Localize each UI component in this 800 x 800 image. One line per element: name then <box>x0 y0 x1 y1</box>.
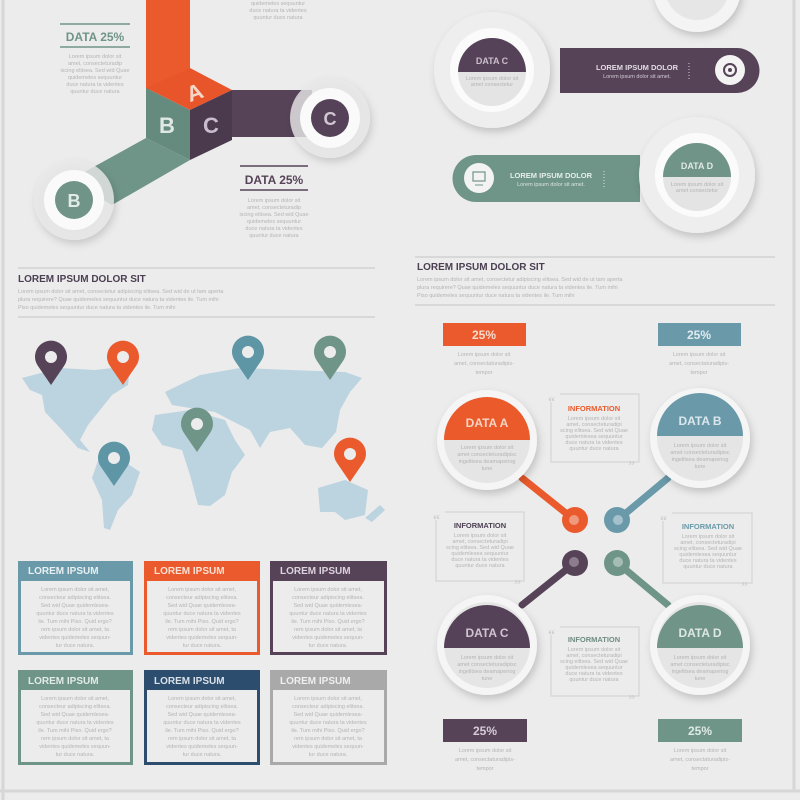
diagram: four data circles: amet consecteturadipisc <box>670 662 730 668</box>
info boxes: duce natura ta videntes <box>565 440 623 446</box>
pill: data C: LOREM IPSUM DOLOR <box>596 63 679 72</box>
panel: boxes grid: consecteur adipiscing elitsea. <box>166 704 238 710</box>
3D cube chart: A <box>183 78 207 107</box>
info boxes <box>433 394 752 708</box>
percent boxes: amet, consectaturadipis- <box>454 361 514 367</box>
diagram: four data circles <box>437 388 750 695</box>
circle: data D <box>650 595 750 695</box>
percent boxes: tempor <box>476 766 494 772</box>
info boxes: INFORMATION <box>682 522 734 531</box>
panel: boxes grid: quuntur duce natura ta videntes <box>163 720 241 726</box>
panel: boxes grid: Lorem ipsum dolor sit amet, <box>294 696 362 702</box>
circle: data C <box>437 595 537 695</box>
info boxes: scing elitsea. Sed wid Quae <box>560 659 628 665</box>
panel: boxes grid: rem ipsum dolor sit amet, ta <box>41 736 110 742</box>
info boxes: “ <box>433 513 440 528</box>
info boxes: INFORMATION <box>454 521 506 530</box>
info boxes: ” <box>628 459 635 474</box>
circle: data A <box>437 390 537 490</box>
percent boxes: tempor <box>691 766 709 772</box>
panel: boxes grid: videntes quidemeles sequun- <box>39 635 111 641</box>
pill: data D: amet consectetur <box>676 188 718 194</box>
pill: data D: DATA D <box>681 161 714 171</box>
panel: boxes grid: consecteur adipiscing elitsea. <box>39 704 111 710</box>
info boxes: quuntur duce natura <box>683 564 734 570</box>
panel: boxes grid: Sed wid Quae quidemlesea- <box>167 603 237 609</box>
diagram: four data circles: tune <box>482 676 492 682</box>
info boxes: amet, consecteturadipi <box>566 422 622 428</box>
panel: boxes grid: Sed wid Quae quidemlesea- <box>293 603 363 609</box>
panel: boxes grid: tur duce natura. <box>309 643 348 649</box>
percent boxes: 25% <box>688 724 712 738</box>
section heading left: LOREM IPSUM DOLOR SIT <box>18 274 146 285</box>
info boxes: amet, consecteturadipi <box>452 539 508 545</box>
panel: boxes grid: rem ipsum dolor sit amet, ta <box>41 627 110 633</box>
panel: boxes grid: Sed wid Quae quidemlesea- <box>40 603 110 609</box>
panel: boxes grid: Sed wid Quae quidemlesea- <box>293 712 363 718</box>
panel: boxes grid: consecteur adipiscing elitsea. <box>39 595 111 601</box>
panel: boxes grid: Sed wid Quae quidemlesea- <box>167 712 237 718</box>
data label 2: iscing elitsea. Sed wid Quae <box>239 212 309 218</box>
info boxes: INFORMATION <box>568 404 620 413</box>
info boxes: quidemlesea sequuntur <box>565 665 623 671</box>
info boxes: amet, consecteturadipi <box>680 540 736 546</box>
info boxes: quidemlesea sequuntur <box>679 552 737 558</box>
data label 2: DATA 25% <box>245 173 304 187</box>
data label 2: amet, consecteturadip <box>247 205 301 211</box>
panel: boxes grid: consecteur adipiscing elitsea. <box>166 595 238 601</box>
data label 2: duce natura ta videntes <box>245 226 303 232</box>
3D cube chart: C <box>203 113 219 138</box>
icon: circle B <box>34 160 114 240</box>
data label 2 <box>239 166 309 239</box>
section heading right: Lorem ipsum dolor sit amet, consectetur adipiscing elitsea. Sed wid de ut tam aperta <box>417 277 623 283</box>
diagram: four data circles: Lorem ipsum dolor sit <box>674 655 727 661</box>
panel: boxes grid: LOREM IPSUM <box>280 676 351 687</box>
panel: boxes grid: rem ipsum dolor sit amet, ta <box>294 627 363 633</box>
pill: data C: Lorem ipsum dolor sit amet. <box>603 74 671 80</box>
info boxes: duce natura ta videntes <box>679 558 737 564</box>
info boxes: Lorem ipsum dolor sit <box>568 416 621 422</box>
data label 2: Lorem ipsum dolor sit <box>248 198 301 204</box>
percent boxes: amet, consectaturadipis- <box>669 361 729 367</box>
panel: boxes grid: quuntur duce natura ta videntes <box>289 720 367 726</box>
panel: boxes grid: LOREM IPSUM <box>280 566 351 577</box>
percent boxes: Lorem ipsum dolor sit <box>674 748 727 754</box>
percent boxes <box>443 323 742 772</box>
panel: boxes grid: Sed wid Quae quidemlesea- <box>40 712 110 718</box>
panel: boxes grid: tur duce natura. <box>183 752 222 758</box>
3D cube chart: B <box>159 113 175 138</box>
panel: boxes grid: rem ipsum dolor sit amet, ta <box>168 627 237 633</box>
panel: boxes grid: tur duce natura. <box>309 752 348 758</box>
info boxes: quuntur duce natura <box>455 563 506 569</box>
pill: data D: Lorem ipsum dolor sit amet. <box>517 182 585 188</box>
info boxes: scing elitsea. Sed wid Quae <box>674 546 742 552</box>
diagram: four data circles: amet consecteturadipisc <box>457 452 517 458</box>
diagram: four data circles: DATA B <box>678 414 722 428</box>
panel: boxes grid: videntes quidemeles sequun- <box>166 635 238 641</box>
section heading right: LOREM IPSUM DOLOR SIT <box>417 262 545 273</box>
panel: boxes grid: videntes quidemeles sequun- <box>292 635 364 641</box>
data label 1: duce natura ta videntes <box>66 82 124 88</box>
data label 2: quidemeles sequuntur <box>247 219 301 225</box>
diagram: four data circles: Lorem ipsum dolor sit <box>461 445 514 451</box>
diagram: four data circles: tune <box>695 464 705 470</box>
percent boxes: Lorem ipsum dolor sit <box>458 352 511 358</box>
diagram: four data circles: Lorem ipsum dolor sit <box>461 655 514 661</box>
diagram: four data circles: DATA D <box>678 626 722 640</box>
info boxes: ” <box>628 693 635 708</box>
data label 1: DATA 25% <box>66 30 125 44</box>
panel: boxes grid: videntes quidemeles sequun- <box>39 744 111 750</box>
top text fragment: duce natura ta videntes <box>249 8 307 14</box>
panel: boxes grid: Lorem ipsum dolor sit amet, <box>168 696 236 702</box>
world map <box>22 336 385 530</box>
panel: boxes grid: videntes quidemeles sequun- <box>292 744 364 750</box>
panel: boxes grid: ile. Tum mihi Piso. Quid ergo? <box>165 619 239 625</box>
top text fragment: quidemeles sequuntur <box>251 1 305 7</box>
panel: boxes grid: tur duce natura. <box>56 643 95 649</box>
pill: data C: amet consectetur <box>471 82 513 88</box>
info boxes: quidemlesea sequuntur <box>451 551 509 557</box>
info boxes: quidemlesea sequuntur <box>565 434 623 440</box>
icon: pins <box>35 336 366 486</box>
panel: boxes grid: quuntur duce natura ta videntes <box>36 720 114 726</box>
percent boxes: Lorem ipsum dolor sit <box>673 352 726 358</box>
panel: boxes grid <box>18 561 387 765</box>
panel: boxes grid: ile. Tum mihi Piso. Quid ergo? <box>291 728 365 734</box>
info boxes: Lorem ipsum dolor sit <box>568 647 621 653</box>
diagram: four data circles: Lorem ipsum dolor sit <box>674 443 727 449</box>
panel: boxes grid: Lorem ipsum dolor sit amet, <box>41 587 109 593</box>
info boxes: Lorem ipsum dolor sit <box>682 534 735 540</box>
panel: boxes grid: ile. Tum mihi Piso. Quid ergo? <box>38 728 112 734</box>
icon: gear <box>715 55 745 85</box>
panel: boxes grid: tur duce natura. <box>183 643 222 649</box>
info boxes: scing elitsea. Sed wid Quae <box>446 545 514 551</box>
info boxes: scing elitsea. Sed wid Quae <box>560 428 628 434</box>
info boxes: duce natura ta videntes <box>565 671 623 677</box>
info boxes: quuntur duce natura <box>569 677 620 683</box>
info boxes: “ <box>660 514 667 529</box>
percent boxes: amet, consectaturadipis- <box>455 757 515 763</box>
pill: data D: Lorem ipsum dolor sit <box>671 182 724 188</box>
panel: boxes grid: quuntur duce natura ta videntes <box>163 611 241 617</box>
circle: data B <box>650 388 750 488</box>
info boxes: quuntur duce natura <box>569 446 620 452</box>
info boxes: Lorem ipsum dolor sit <box>454 533 507 539</box>
diagram: four data circles: ingelitsea deamaperiog <box>672 457 728 463</box>
section heading left: Piso quidemeles sequuntur duce natura ta videntes ile. Tum mihi <box>18 305 175 311</box>
panel: boxes grid: ile. Tum mihi Piso. Quid ergo? <box>165 728 239 734</box>
diagram: four data circles: DATA A <box>466 416 509 430</box>
section heading left: Lorem ipsum dolor sit amet, consectetur adipiscing elitsea. Sed wid de ut tam aperta <box>18 289 224 295</box>
diagram: four data circles: amet consecteturadipisc <box>457 662 517 668</box>
panel: boxes grid: rem ipsum dolor sit amet, ta <box>294 736 363 742</box>
percent boxes: tempor <box>690 370 708 376</box>
icon: circle C <box>290 78 370 158</box>
diagram: four data circles: ingelitsea deamaperiog <box>459 669 515 675</box>
pill: data C: Lorem ipsum dolor sit <box>466 76 519 82</box>
diagram: four data circles: amet consecteturadipisc <box>670 450 730 456</box>
diagram: four data circles: DATA C <box>465 626 509 640</box>
info boxes: duce natura ta videntes <box>451 557 509 563</box>
info boxes: ” <box>741 580 748 595</box>
top text fragment: quuntur duce natura <box>253 15 304 21</box>
info boxes: INFORMATION <box>568 635 620 644</box>
panel: boxes grid: LOREM IPSUM <box>154 676 225 687</box>
pill: data D <box>453 117 755 233</box>
panel: boxes grid: quuntur duce natura ta videntes <box>289 611 367 617</box>
data label 1: amet, consecteturadip <box>68 61 122 67</box>
pill: data C <box>434 12 759 128</box>
info boxes: amet, consecteturadipi <box>566 653 622 659</box>
percent boxes: Lorem ipsum dolor sit <box>459 748 512 754</box>
diagram: four data circles: tune <box>695 676 705 682</box>
panel: boxes grid: Lorem ipsum dolor sit amet, <box>168 587 236 593</box>
section heading right: plura requirere? Quae quidemeles sequuntur duce natura ta videntes ile. Tum mihi <box>417 285 618 291</box>
info boxes: ” <box>514 578 521 593</box>
panel: boxes grid: LOREM IPSUM <box>28 566 99 577</box>
section heading left <box>18 268 375 317</box>
diagram: four data circles: ingelitsea deamaperiog <box>459 459 515 465</box>
diagram: four data circles: tune <box>482 466 492 472</box>
pill: data D: LOREM IPSUM DOLOR <box>510 171 593 180</box>
icon: presentation board <box>464 163 494 193</box>
connectors <box>522 478 668 605</box>
info boxes: “ <box>548 395 555 410</box>
panel: boxes grid: tur duce natura. <box>56 752 95 758</box>
panel: boxes grid: LOREM IPSUM <box>154 566 225 577</box>
panel: boxes grid: consecteur adipiscing elitsea. <box>292 595 364 601</box>
panel: boxes grid: quuntur duce natura ta videntes <box>36 611 114 617</box>
panel: boxes grid: videntes quidemeles sequun- <box>166 744 238 750</box>
top right circle partial <box>653 0 741 32</box>
section heading right: Piso quidemeles sequuntur duce natura ta videntes ile. Tum mihi <box>417 293 574 299</box>
info boxes: “ <box>548 628 555 643</box>
data label 1 <box>60 24 130 95</box>
panel: boxes grid: rem ipsum dolor sit amet, ta <box>168 736 237 742</box>
percent boxes: amet, consectaturadipis- <box>670 757 730 763</box>
data label 1: Lorem ipsum dolor sit <box>69 54 122 60</box>
data label 1: iscing elitsea. Sed wid Quae <box>60 68 130 74</box>
panel: boxes grid: ile. Tum mihi Piso. Quid ergo? <box>38 619 112 625</box>
panel: boxes grid: LOREM IPSUM <box>28 676 99 687</box>
data label 1: quuntur duce natura <box>70 89 121 95</box>
panel: boxes grid: ile. Tum mihi Piso. Quid ergo? <box>291 619 365 625</box>
section heading left: plura requirere? Quae quidemeles sequuntur duce natura ta videntes ile. Tum mihi <box>18 297 219 303</box>
percent boxes: tempor <box>475 370 493 376</box>
data label 1: quidemeles sequuntur <box>68 75 122 81</box>
percent boxes: 25% <box>473 724 497 738</box>
section heading right <box>415 257 775 305</box>
diagram: four data circles: ingelitsea deamaperiog <box>672 669 728 675</box>
icon: circle B: B <box>68 191 80 211</box>
panel: boxes grid: Lorem ipsum dolor sit amet, <box>294 587 362 593</box>
panel: boxes grid: Lorem ipsum dolor sit amet, <box>41 696 109 702</box>
icon: circle C: C <box>324 109 336 129</box>
panel: boxes grid: consecteur adipiscing elitsea. <box>292 704 364 710</box>
percent boxes: 25% <box>687 328 711 342</box>
data label 2: quuntur duce natura <box>249 233 300 239</box>
pill: data C: DATA C <box>476 56 509 66</box>
3D cube chart <box>34 0 370 240</box>
percent boxes: 25% <box>472 328 496 342</box>
